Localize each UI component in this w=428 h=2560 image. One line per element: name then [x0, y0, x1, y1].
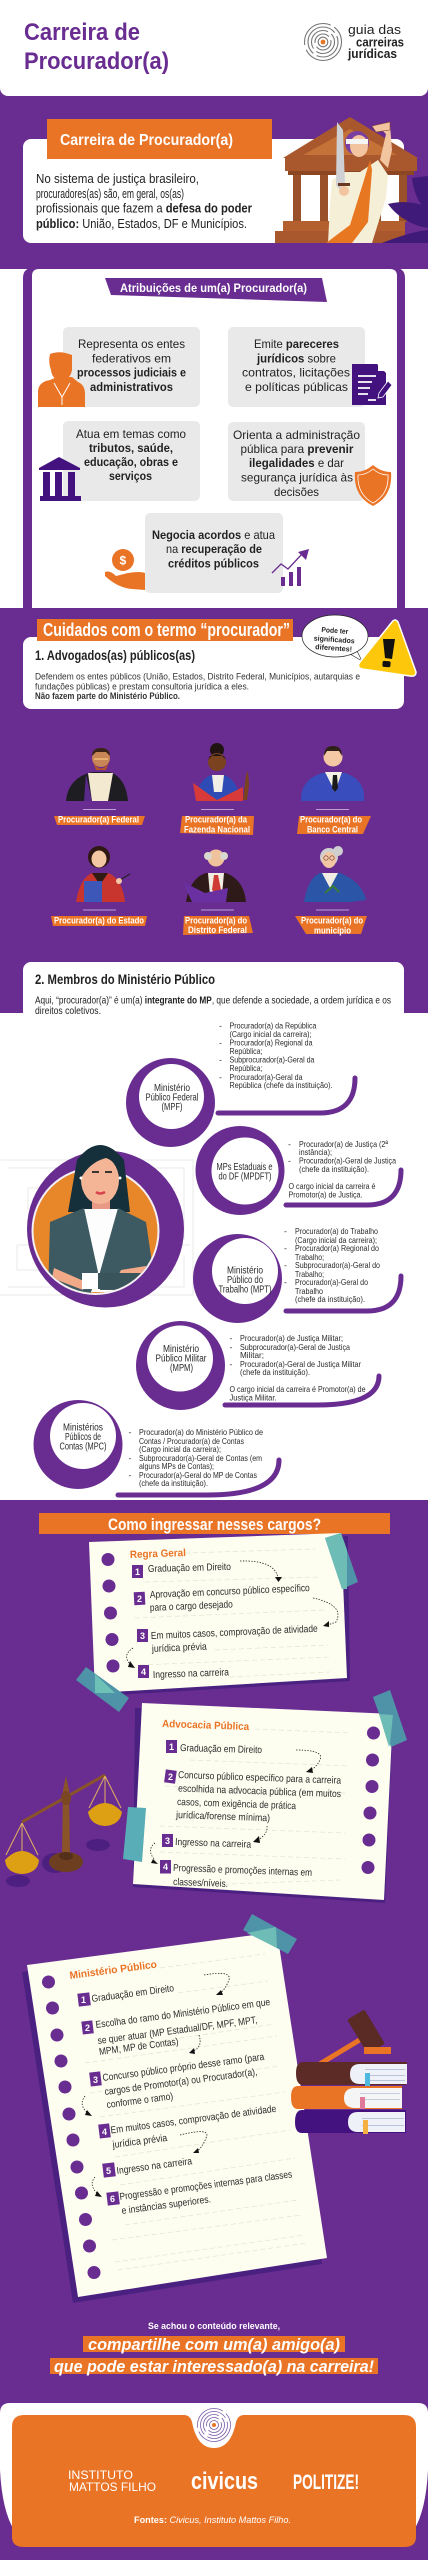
step 1: 1	[169, 1742, 174, 1752]
list: MPM roles: (chefe da instituição).	[240, 1367, 310, 1377]
callout: speech bubble: diferentes!	[315, 642, 352, 654]
node: MPT	[193, 1226, 401, 1323]
illustration: woman portrait	[27, 1145, 184, 1308]
text: ministry intro: direitos coletivos.	[35, 1006, 101, 1017]
step 3: 3	[140, 1631, 145, 1641]
intro text: público: União, Estados, DF e Municípios.	[36, 217, 247, 231]
intro text: procuradores(as) são, em geral, os(as)	[36, 187, 184, 201]
callout: speech bubble: significados	[313, 634, 355, 645]
card: prevent illegalities: ilegalidades e dar	[249, 457, 344, 470]
card: topics: educação, obras e	[84, 456, 179, 469]
step 5: 5	[106, 2166, 111, 2176]
node: MPC: Contas (MPC)	[60, 1442, 106, 1452]
step 1	[166, 1740, 263, 1756]
list: MPM roles: Justiça Militar.	[230, 1392, 276, 1402]
list: MPM roles: Procurador(a)-Geral de Justiça Militar	[240, 1359, 361, 1369]
list: MPF roles: -	[219, 1055, 222, 1065]
list: MPDFT roles	[288, 1139, 396, 1200]
figure: municipio	[304, 846, 366, 910]
step 2: casos, com exigência de prática	[177, 1797, 297, 1812]
list: MPF roles: Procurador(a) da República	[230, 1021, 317, 1031]
figure: banco central	[301, 746, 364, 810]
icon: hand and coin	[105, 549, 145, 590]
card: negotiate agreements: créditos públicos	[168, 558, 259, 570]
step 4	[138, 1665, 229, 1681]
node: MPM: Ministério	[163, 1344, 199, 1355]
step 3: 3	[165, 1836, 170, 1846]
label: banco central: Banco Central	[307, 824, 358, 834]
intro text: profissionais que fazem a defesa do poder	[36, 202, 252, 216]
intro heading: Carreira de Procurador(a)	[60, 132, 233, 149]
list: MPM roles	[230, 1333, 366, 1402]
logo: civicus: civicus	[191, 2468, 258, 2495]
node: MPF	[126, 1021, 355, 1147]
arrow: step 5 to 6	[92, 2177, 102, 2197]
step 4: Progressão e promoções internas em	[173, 1863, 312, 1879]
arrow: step 1 to 2	[296, 1750, 321, 1773]
list: MPC roles: alguns MPs de Contas);	[139, 1461, 214, 1471]
list: MPDFT roles: O cargo inicial da carreira é	[288, 1181, 376, 1191]
list: MPT roles: (chefe da instituição).	[295, 1294, 365, 1304]
share message: compartilhe com um(a) amigo(a)	[88, 2335, 340, 2354]
step 2	[134, 1583, 310, 1614]
step 1	[77, 1983, 175, 2007]
subheading: public attorneys: 1. Advogados(as) públicos(as)	[35, 647, 195, 663]
arrow: step 4 to 5	[180, 2132, 207, 2153]
list: MPDFT roles: Procurador(a) de Justiça (2ª	[299, 1139, 389, 1149]
list: MPC roles: -	[128, 1453, 132, 1463]
step 3: conforme o ramo)	[106, 2091, 174, 2111]
step 3: Em muitos casos, comprovação de atividade	[151, 1624, 318, 1642]
icon: growth chart	[272, 549, 309, 586]
list: MPC roles	[128, 1427, 263, 1488]
title: Carreira de	[24, 19, 140, 46]
label: municipio: Procurador(a) do	[301, 914, 363, 926]
step 4	[98, 2104, 277, 2151]
card: legal opinions: jurídicos sobre	[256, 352, 336, 366]
arrow: step 3 to 4	[82, 2096, 92, 2116]
text: public attorneys	[35, 672, 360, 702]
note: ministerio publico	[22, 1914, 327, 2303]
card: negotiate agreements	[145, 513, 283, 593]
list: MPC roles: Procurador(a)-Geral do MP de Contas	[139, 1470, 258, 1480]
share message: Se achou o conteúdo relevante,	[148, 2321, 280, 2332]
share message	[50, 2321, 378, 2376]
list: MPC roles: -	[128, 1427, 132, 1437]
step 5: Ingresso na carreira	[116, 2156, 193, 2177]
step 3	[137, 1624, 318, 1655]
list: MPF roles: (Cargo inicial da carreira);	[230, 1029, 312, 1039]
list: MPF roles: República;	[230, 1046, 262, 1056]
step 1	[132, 1562, 231, 1578]
list: MPDFT roles: -	[288, 1139, 291, 1149]
section heading: how to enter: Como ingressar nesses cargos?	[108, 1516, 321, 1534]
note: advocacia publica: Advocacia Pública	[162, 1718, 249, 1733]
step 2: escolhida na advocacia pública (em muitos	[178, 1784, 341, 1800]
list: MPDFT roles: instância);	[299, 1147, 332, 1157]
card: represent entities: Representa os entes	[78, 338, 185, 351]
list: MPDFT roles: (chefe da instituição).	[299, 1164, 369, 1174]
logo: instituto mattos filho	[68, 2468, 156, 2494]
step 4: Ingresso na carreira	[153, 1667, 229, 1681]
illustration: temple and lady justice	[275, 117, 428, 243]
arrow: step 2 to 3	[313, 1598, 338, 1627]
list: MPF roles: -	[219, 1072, 222, 1082]
icon: lawyer	[38, 352, 85, 407]
step 3: cargos de Promotor(a) ou Procurador(a),	[104, 2067, 258, 2098]
figure: fazenda nacional	[193, 743, 249, 810]
arrow: step 1 to 2	[204, 1973, 229, 1995]
title: Procurador(a)	[24, 48, 169, 75]
list: MPT roles	[284, 1226, 380, 1304]
step 2: se quer atuar (MP Estadual/DF, MPF, MPT,	[97, 2015, 258, 2047]
card: prevent illegalities: decisões	[274, 486, 319, 499]
tape bottom	[76, 1667, 129, 1712]
list: MPF roles: República (chefe da instituição).	[230, 1080, 332, 1090]
step 4: jurídica prévia	[111, 2133, 168, 2151]
step 6: e instâncias superiores.	[121, 2194, 212, 2217]
label: distrito federal: Distrito Federal	[188, 924, 247, 935]
label: municipio	[295, 914, 367, 936]
node: MPDFT	[196, 1126, 401, 1215]
card: topics: Atua em temas como	[76, 428, 186, 441]
arrow: step 1 to 2	[240, 1561, 282, 1582]
card: represent entities: administrativos	[90, 381, 173, 394]
panel: intro card	[23, 117, 428, 243]
list: MPM roles: O cargo inicial da carreira é Promotor(a) de	[230, 1384, 366, 1394]
step 1: Graduação em Direito	[148, 1562, 231, 1575]
note: regra geral: Regra Geral	[130, 1547, 186, 1561]
step 4: 4	[163, 1862, 168, 1872]
step 6	[106, 2169, 293, 2217]
text: ministry intro	[35, 996, 391, 1017]
label: municipio: município	[314, 924, 351, 936]
attributions heading	[105, 278, 327, 302]
list: MPT roles: -	[284, 1277, 287, 1287]
card: legal opinions: Emite pareceres	[254, 338, 339, 351]
arrow: step 2 to 3	[253, 1826, 267, 1843]
group: procurador roles	[51, 743, 371, 936]
list: MPT roles: Trabalho;	[295, 1269, 324, 1279]
card: legal opinions: contratos, licitações	[242, 366, 350, 380]
card: topics: serviços	[109, 470, 152, 483]
icon: courthouse	[39, 457, 81, 501]
label: distrito federal: Procurador(a) do	[185, 914, 247, 926]
list: MPM roles: Subprocurador(a)-Geral de Justiça	[240, 1342, 350, 1352]
step 3: Concurso público próprio desse ramo (para	[102, 2052, 265, 2084]
label: banco central	[297, 814, 371, 834]
sources: Fontes: Civicus, Instituto Mattos Filho.	[134, 2515, 291, 2526]
node: MPDFT: do DF (MPDFT)	[218, 1172, 272, 1182]
step 2: MPM, MP de Contas)	[98, 2037, 179, 2058]
step 3: 3	[93, 2075, 98, 2085]
step 2: Aprovação em concurso público específico	[150, 1583, 310, 1601]
node: MPDFT: MPs Estaduais e	[216, 1162, 273, 1173]
node: MPF: Ministério	[154, 1083, 190, 1094]
list: MPF roles	[219, 1021, 332, 1090]
title	[24, 19, 169, 75]
node: MPM	[136, 1321, 379, 1410]
label: procurador federal: Procurador(a) Federal	[58, 814, 139, 824]
step 4: 4	[141, 1667, 146, 1677]
step 3: jurídica prévia	[151, 1642, 207, 1655]
section heading: cuidados: Cuidados com o termo “procurador”	[43, 619, 290, 640]
panel: term warning card	[23, 615, 416, 709]
figure: procurador federal	[66, 748, 128, 810]
footer panel	[0, 2403, 428, 2547]
icon: shield	[355, 465, 391, 506]
node: MPM: Público Militar	[156, 1354, 207, 1364]
card: topics	[63, 421, 200, 501]
logo: guia das carreiras juridicas	[304, 23, 404, 61]
callout: speech bubble	[302, 615, 368, 661]
node: MPT: Ministério	[227, 1266, 263, 1276]
list: MPC roles: Procurador(a) do Ministério Público de	[139, 1427, 263, 1437]
logo: guia das carreiras juridicas: jurídicas	[347, 47, 397, 61]
text: public attorneys: Não fazem parte do Ministério Público.	[35, 691, 180, 702]
list: MPC roles: (chefe da instituição).	[139, 1478, 208, 1488]
intro text	[36, 172, 252, 231]
text: public attorneys: Defendem os entes públicos (União, Estados, Distrito Federal, Municípios, autarquias e	[35, 672, 360, 682]
list: MPT roles: -	[284, 1243, 287, 1253]
note: regra geral	[76, 1533, 358, 1712]
list: MPF roles: República;	[230, 1063, 262, 1073]
node: MPT: Público do	[227, 1275, 263, 1286]
list: MPT roles: Trabalho;	[295, 1252, 324, 1262]
text: public attorneys: fundações públicas) e prestam consultoria jurídica a eles.	[35, 682, 249, 692]
figure: distrito federal	[183, 850, 246, 910]
list: MPT roles: -	[284, 1226, 287, 1236]
card: represent entities: federativos em	[92, 352, 171, 366]
intro text: No sistema de justiça brasileiro,	[36, 172, 199, 186]
step 3	[89, 2052, 265, 2111]
label: fazenda nacional: Procurador(a) da	[185, 814, 248, 824]
panel: attributions	[0, 260, 428, 612]
node: MPT: Trabalho (MPT)	[218, 1284, 272, 1296]
label: distrito federal	[183, 914, 253, 935]
step 2: 2	[137, 1594, 142, 1604]
card: topics: tributos, saúde,	[89, 442, 173, 455]
step 2: 2	[85, 2023, 90, 2033]
step 1: 1	[135, 1567, 140, 1577]
callout: speech bubble: Pode ter	[321, 625, 349, 636]
intro heading	[47, 119, 272, 159]
list: MPC roles: Contas / Procurador(a) de Contas	[139, 1436, 245, 1446]
logo: guia das carreiras juridicas: guia das	[348, 23, 401, 37]
list: MPC roles: (Cargo inicial da carreira);	[139, 1444, 221, 1454]
step 4: Em muitos casos, comprovação de atividade	[110, 2104, 277, 2136]
subheading: ministry members: 2. Membros do Ministério Público	[35, 971, 215, 987]
step 1: Graduação em Direito	[91, 1983, 175, 2005]
label: fazenda nacional	[180, 814, 254, 835]
node: MPF: (MPF)	[162, 1102, 182, 1113]
card: prevent illegalities: segurança jurídica às	[241, 472, 353, 484]
step 2: Escolha do ramo do Ministério Público em que	[95, 1997, 271, 2031]
step 6: Progressão e promoções internas para classes	[119, 2169, 293, 2203]
step 1: 1	[81, 1995, 86, 2005]
step 4: classes/níveis.	[173, 1877, 228, 1890]
list: MPT roles: Subprocurador(a)-Geral do	[295, 1260, 380, 1270]
label: procurador do estado: Procurador(a) do Estado	[54, 914, 144, 926]
node: MPC: Ministérios	[63, 1422, 103, 1434]
card: prevent illegalities: Orienta a administração	[233, 429, 360, 442]
list: MPT roles: Procurador(a) do Trabalho	[295, 1226, 378, 1236]
step 2: 2	[168, 1772, 173, 1782]
step 2: para o cargo desejado	[150, 1599, 233, 1614]
list: MPT roles: Procurador(a)-Geral do	[295, 1277, 368, 1287]
header panel	[0, 0, 428, 96]
step 6: 6	[110, 2194, 115, 2204]
list: MPM roles: Procurador(a) de Justiça Militar;	[240, 1333, 343, 1343]
logo: instituto mattos filho: INSTITUTO	[68, 2468, 133, 2482]
step 1: Graduação em Direito	[180, 1743, 263, 1756]
logo: instituto mattos filho: MATTOS FILHO	[69, 2480, 156, 2494]
arrow: step 3 to 4	[150, 1843, 158, 1864]
tape top	[325, 1533, 358, 1589]
tape left	[123, 1807, 146, 1862]
list: MPDFT roles: -	[288, 1156, 291, 1166]
step 2	[164, 1769, 342, 1824]
list: MPT roles: (Cargo inicial da carreira);	[295, 1235, 377, 1245]
list: MPC roles: -	[128, 1470, 132, 1480]
label: banco central: Procurador(a) do	[300, 814, 362, 824]
card: prevent illegalities: pública para prevenir	[240, 443, 354, 456]
list: MPT roles: Trabalho	[295, 1286, 323, 1296]
icon: document	[352, 362, 392, 405]
list: MPT roles: Procurador(a) Regional do	[295, 1243, 379, 1253]
step 3	[162, 1834, 252, 1851]
list: MPM roles: -	[230, 1342, 232, 1352]
list: MPF roles: -	[219, 1021, 222, 1031]
card: legal opinions: e políticas públicas	[245, 381, 348, 394]
tape	[243, 1914, 297, 1954]
card: negotiate agreements: Negocia acordos e atua	[152, 529, 276, 542]
card: represent entities: processos judiciais e	[77, 366, 187, 380]
step 4	[160, 1860, 312, 1890]
note: advocacia publica	[123, 1690, 407, 1903]
list: MPF roles: -	[219, 1038, 222, 1048]
illustration: gavel and books	[291, 2009, 407, 2134]
list: MPM roles: -	[230, 1333, 232, 1343]
node: MPM: (MPM)	[170, 1363, 193, 1374]
list: MPF roles: Subprocurador(a)-Geral da	[230, 1055, 315, 1065]
logo: politize: POLITIZE!	[293, 2471, 359, 2494]
icon: hand and coin: $	[120, 554, 126, 568]
card: negotiate agreements: na recuperação de	[166, 543, 263, 556]
card: legal opinions	[228, 327, 365, 407]
step 3: Ingresso na carreira	[175, 1837, 252, 1851]
text: ministry intro: Aqui, “procurador(a)” é um(a) integrante do MP, que defende a sociedade, a ordem jurídica e os	[35, 996, 391, 1006]
list: MPF roles: Procurador(a) Regional da	[230, 1038, 313, 1048]
node: MPC	[34, 1400, 279, 1495]
logo: labyrinth	[198, 2408, 230, 2442]
list: MPDFT roles: Procurador(a)-Geral de Justiça	[299, 1156, 396, 1166]
step 2	[81, 1997, 271, 2058]
list: MPM roles: Militar;	[240, 1350, 264, 1360]
node: MPC: Públicos de	[65, 1432, 101, 1443]
label: fazenda nacional: Fazenda Nacional	[184, 824, 250, 834]
section heading: how to enter	[39, 1513, 390, 1534]
arrow: step 3 to 4	[127, 1648, 135, 1668]
step 2: jurídica/forense mínima)	[175, 1810, 270, 1824]
card: prevent illegalities	[228, 422, 365, 501]
note: ministerio publico: Ministério Público	[69, 1959, 158, 1982]
list: MPT roles: -	[284, 1260, 287, 1270]
list: MPM roles: -	[230, 1359, 232, 1369]
tape top	[373, 1690, 407, 1747]
icon: warning	[358, 620, 416, 676]
card: represent entities	[63, 327, 200, 407]
arrow: step 2 to 3	[189, 2035, 200, 2054]
logo: guia das carreiras juridicas: carreiras	[356, 36, 404, 50]
step 4: 4	[102, 2127, 107, 2137]
node: MPF: Público Federal	[146, 1092, 198, 1104]
step 2: Concurso público específico para a carreira	[178, 1770, 342, 1787]
panel: public ministry members	[0, 962, 428, 1500]
list: MPC roles: Subprocurador(a)-Geral de Contas (em	[139, 1453, 262, 1463]
list: MPDFT roles: Promotor(a) de Justiça.	[288, 1190, 362, 1200]
step 5	[102, 2156, 193, 2178]
illustration: scales	[5, 1775, 122, 1887]
figure: procurador do estado	[76, 846, 130, 910]
share message: que pode estar interessado(a) na carreira!	[54, 2357, 374, 2376]
attributions heading: Atribuições de um(a) Procurador(a)	[120, 281, 307, 295]
list: MPF roles: Procurador(a)-Geral da	[230, 1072, 303, 1082]
